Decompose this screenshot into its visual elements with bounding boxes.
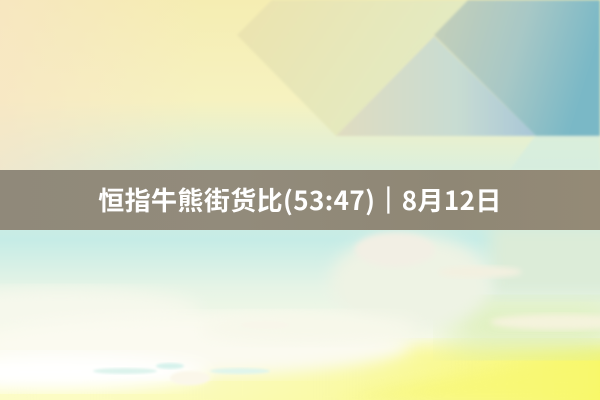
title band — [0, 170, 600, 230]
title: 恒指牛熊街货比(53:47)│8月12日 — [98, 181, 502, 218]
geometric shapes — [237, 0, 600, 170]
clouds and lower sky — [0, 225, 600, 400]
